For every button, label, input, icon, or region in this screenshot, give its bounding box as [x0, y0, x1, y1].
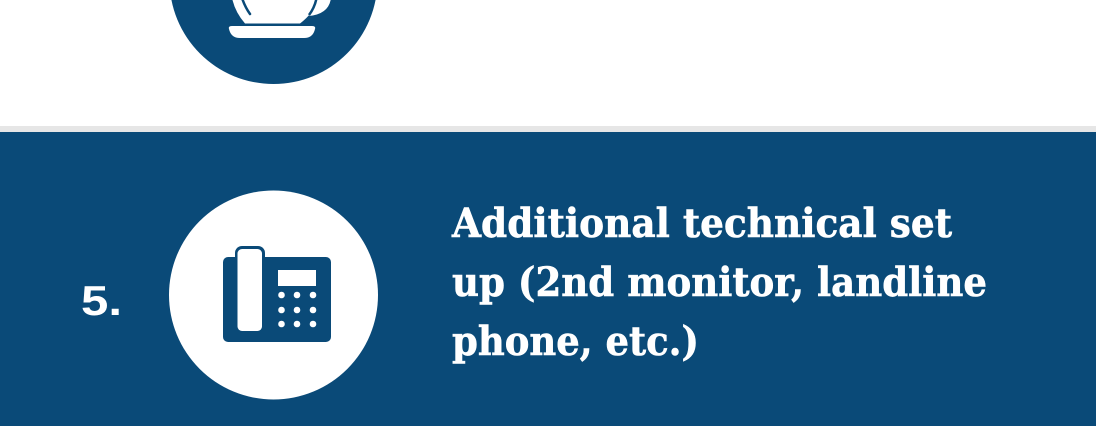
- text: item description: Additional technical set: [451, 200, 952, 247]
- text: item description: phone, etc.): [452, 318, 699, 365]
- icon: desk phone: [169, 190, 378, 400]
- icon: coffee cup: [170, 0, 378, 84]
- text: item description: [451, 200, 987, 365]
- panel: item 5: [0, 132, 1096, 426]
- text: item description: up (2nd monitor, landline: [452, 259, 987, 306]
- number 5: 5.: [81, 277, 122, 324]
